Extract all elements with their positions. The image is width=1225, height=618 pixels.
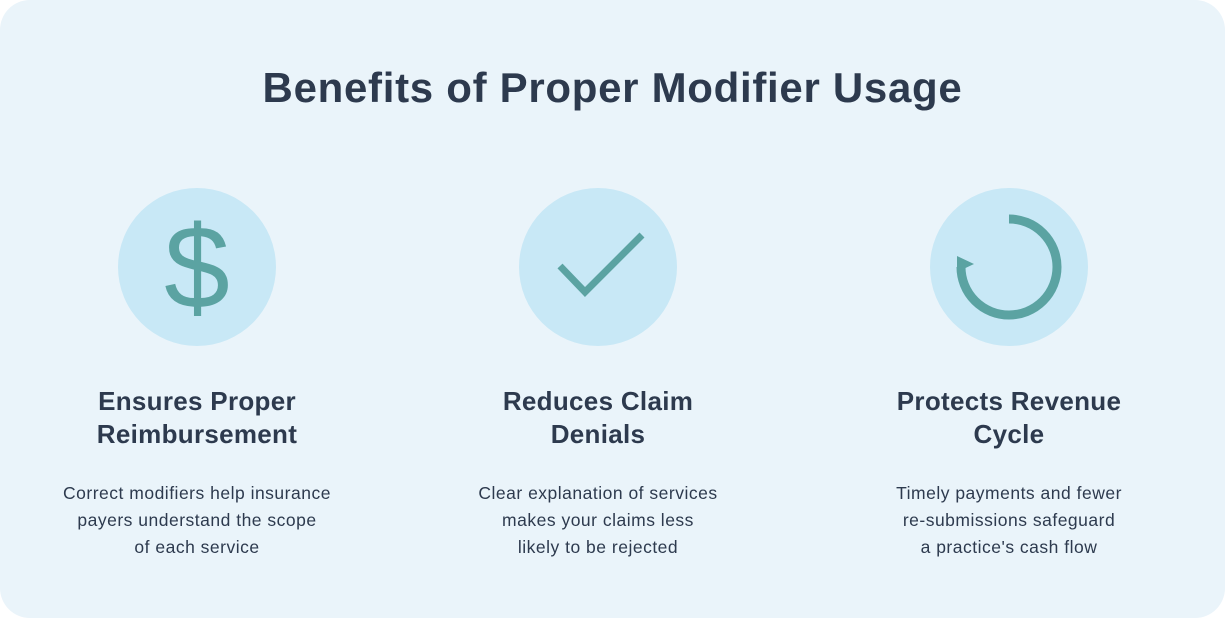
icon: checkmark xyxy=(519,188,677,346)
heading: Reimbursement xyxy=(97,419,297,449)
heading: Cycle xyxy=(974,419,1044,449)
description xyxy=(478,483,718,557)
icon: dollar xyxy=(118,188,276,346)
description: Clear explanation of services xyxy=(478,483,718,503)
description: of each service xyxy=(134,537,260,557)
description: payers understand the scope xyxy=(77,510,317,530)
description: Timely payments and fewer xyxy=(896,483,1122,503)
heading xyxy=(97,386,297,449)
description: re-submissions safeguard xyxy=(903,510,1115,530)
heading: Ensures Proper xyxy=(98,386,296,416)
column: reimbursement xyxy=(63,188,331,557)
heading: Denials xyxy=(551,419,645,449)
column: denials xyxy=(478,188,718,557)
description: Correct modifiers help insurance xyxy=(63,483,331,503)
icon: cycle arrow xyxy=(930,188,1088,346)
icon: dollar: $ xyxy=(164,202,230,334)
description: a practice's cash flow xyxy=(921,537,1097,557)
description: makes your claims less xyxy=(502,510,694,530)
title: Benefits of Proper Modifier Usage xyxy=(263,64,962,111)
column: revenue xyxy=(896,188,1122,557)
description xyxy=(896,483,1122,557)
description: likely to be rejected xyxy=(518,537,678,557)
heading: Reduces Claim xyxy=(503,386,693,416)
heading: Protects Revenue xyxy=(897,386,1121,416)
heading xyxy=(503,386,693,449)
description xyxy=(63,483,331,557)
heading xyxy=(897,386,1121,449)
